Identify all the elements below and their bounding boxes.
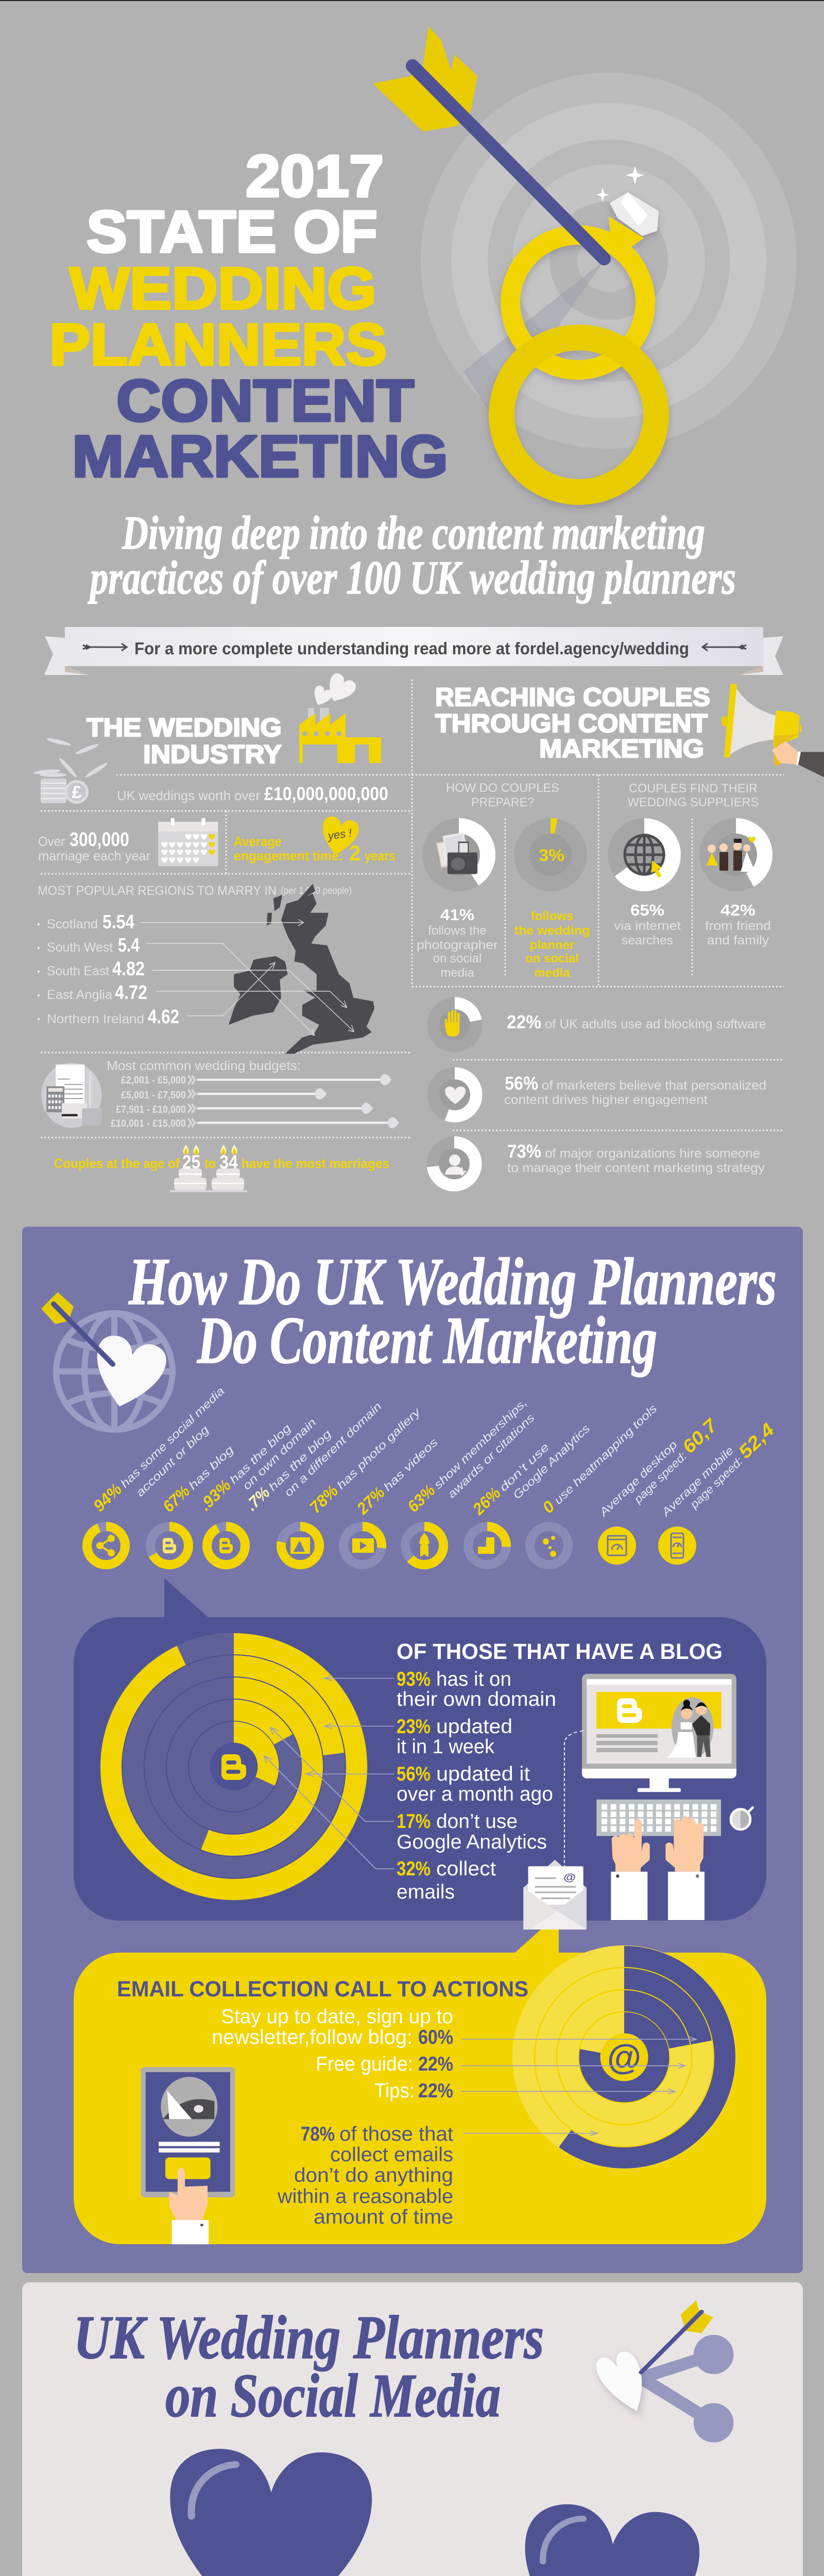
rotated stat labels: .93% <box>196 1476 234 1514</box>
donut: 3% wedding planner: on social <box>525 952 579 965</box>
stat: engagement: yes ! <box>326 826 353 842</box>
heading: INDUSTRY <box>143 740 282 769</box>
rotated stat labels: has photo gallery <box>334 1404 424 1492</box>
panel: UK wedding planners on social media <box>11 2282 803 2576</box>
title: WEDDING <box>70 256 376 321</box>
sub-heading: how do couples prepare: HOW DO COUPLES <box>446 781 559 795</box>
region list: Scotland <box>47 917 98 931</box>
region list <box>38 911 179 1028</box>
donut: 41% photographer <box>417 818 498 980</box>
email stats: collect emails <box>330 2144 453 2166</box>
donut: 42% friends and family: from friend <box>705 919 771 933</box>
rotated stat labels: account or blog <box>133 1423 212 1499</box>
arrows: regions to map <box>141 919 354 1036</box>
stat: 73% hire someone: of major organizations hire someone <box>545 1146 760 1161</box>
donut: 41% photographer: follows the <box>428 924 487 938</box>
email stats: 78% <box>301 2123 335 2145</box>
title: STATE OF <box>87 199 377 265</box>
email stats: newsletter,follow blog: <box>212 2026 413 2048</box>
rotated stat labels: Average desktop <box>596 1438 680 1519</box>
stat: worth: UK weddings worth over <box>117 788 260 803</box>
region list: 4.62 <box>148 1006 179 1028</box>
stat: 56% personalized: of marketers believe that personalized <box>542 1078 766 1093</box>
rotated stat labels: 78% <box>306 1481 341 1517</box>
banner: read more ribbon: For a more complete understanding read more at fordel.agency/wedding <box>134 639 689 658</box>
heading: UK Wedding Planners <box>74 2303 544 2371</box>
region list: 5.54 <box>102 911 134 933</box>
rotated stat labels <box>90 1381 778 1519</box>
icons: page speed <box>608 1533 683 1558</box>
heading: EMAIL COLLECTION CALL TO ACTIONS <box>117 1977 528 2002</box>
region list: South East <box>47 964 109 978</box>
icon: computer with hands <box>582 1674 753 1920</box>
chart: wedding budgets: Most common wedding budgets: <box>107 1059 301 1073</box>
speech tail <box>164 1578 209 1618</box>
blog stats: 93% <box>397 1668 431 1690</box>
heading: MARKETING <box>539 734 704 763</box>
stat: engagement: years <box>365 848 396 863</box>
sub-heading: how do couples prepare <box>446 781 559 809</box>
regions heading: (per 1,000 people) <box>281 886 352 896</box>
email stats: don’t do anything <box>294 2164 453 2187</box>
email stats <box>212 2006 453 2228</box>
rotated stat labels: 26% <box>469 1483 504 1519</box>
stat: engagement: engagement time: <box>234 848 343 863</box>
stat: marriages: marriage each year <box>38 848 150 863</box>
email stats: 60% <box>418 2026 453 2048</box>
blog stats <box>397 1668 556 1903</box>
blog stats: 17% <box>397 1810 431 1833</box>
balloons: blue hearts (followers) <box>50 2447 747 2576</box>
icon: wedding rings <box>502 192 659 492</box>
donut: 3% wedding planner: media <box>534 966 570 980</box>
stat: 56% personalized: 56% <box>505 1073 538 1094</box>
title: MARKETING <box>72 424 448 489</box>
stat: worth <box>117 783 388 804</box>
sub-heading: how do couples prepare: PREPARE? <box>471 795 534 809</box>
stat: couples age <box>54 1151 389 1173</box>
icon: cakes <box>170 1145 247 1192</box>
donut: 41% photographer: photographer <box>417 938 498 952</box>
region list: South West <box>47 940 113 955</box>
panel: of those that have a blog <box>74 1617 766 1921</box>
icon: calendar <box>158 818 218 866</box>
rotated stat labels: 60,7 <box>678 1414 722 1458</box>
blog stats: 23% <box>397 1716 431 1738</box>
icon row: stat donuts <box>87 1527 568 1565</box>
regions heading: MOST POPULAR REGIONS TO MARRY IN <box>38 884 277 898</box>
stat: 73% hire someone <box>426 1137 765 1191</box>
blog stats: updated <box>436 1716 512 1738</box>
donut: 42% friends and family <box>699 818 772 947</box>
stat: engagement: Average <box>234 834 282 849</box>
heading: on Social Media <box>165 2361 501 2430</box>
chart: wedding budgets: £2,001 - £5,000 <box>121 1075 186 1086</box>
email stats: 22% <box>418 2080 453 2102</box>
donut: 41% photographer: 41% <box>440 906 474 924</box>
panel: reaching couples <box>417 683 824 1191</box>
rotated stat labels: has the blog <box>227 1421 294 1486</box>
stat: 22% ad blocking <box>427 997 766 1052</box>
rotated stat labels: awards or citations <box>445 1411 537 1501</box>
donut: 65% internet searches: 65% <box>630 901 664 919</box>
chart: wedding budgets: £5,001 - £7,500 <box>121 1090 186 1101</box>
rotated stat labels: has the blog <box>266 1427 334 1494</box>
donut: 3% wedding planner: follows <box>531 909 573 923</box>
stat: 73% hire someone: 73% <box>507 1141 541 1162</box>
rotated stat labels: don’t use <box>497 1440 552 1494</box>
title: CONTENT <box>116 368 414 434</box>
email stats: Stay up to date, sign up to <box>221 2006 453 2028</box>
icons inside donuts <box>96 1527 696 1565</box>
icon: factory <box>299 671 381 763</box>
stat: 22% ad blocking: 22% <box>507 1011 541 1032</box>
rotated stat labels: use heatmapping tools <box>552 1402 659 1507</box>
blog stats: has it on <box>436 1668 511 1690</box>
rotated stat labels: page speed: <box>631 1449 689 1506</box>
blog stats: 56% <box>397 1763 431 1785</box>
donut: 41% photographer: media <box>440 966 474 980</box>
email stats: within a reasonable <box>277 2185 453 2208</box>
heading <box>74 2303 544 2430</box>
icon: arrow <box>373 26 604 259</box>
stat: worth: £10,000,000,000 <box>264 783 388 804</box>
blog stats: 32% <box>397 1858 431 1880</box>
target rings illustration <box>421 73 797 449</box>
heading: OF THOSE THAT HAVE A BLOG <box>397 1639 723 1664</box>
donut: 3% wedding planner: planner <box>530 938 574 952</box>
panel: email collection <box>74 1913 766 2244</box>
stat: couples age: have the most marriages <box>242 1156 389 1171</box>
region list: 4.82 <box>112 958 145 980</box>
icon: coins <box>33 737 108 804</box>
dotted dividers: top section <box>41 680 784 1138</box>
region list: East Anglia <box>47 988 112 1002</box>
stat: 73% hire someone: to manage their content marketing strategy <box>507 1161 765 1175</box>
donut: 41% photographer: on social <box>433 952 482 965</box>
donut: 65% internet searches: via internet <box>614 919 681 933</box>
sub-heading: couples find suppliers: WEDDING SUPPLIERS <box>627 795 759 809</box>
blog stats: emails <box>397 1881 455 1903</box>
rotated stat labels: 94% <box>90 1480 125 1515</box>
blog stats: Google Analytics <box>397 1831 547 1853</box>
title: 2017 <box>246 144 384 209</box>
blog stats: don’t use <box>436 1810 518 1833</box>
icon: sparkles <box>596 166 644 202</box>
donut: 42% friends and family: and family <box>707 934 769 947</box>
icon: budget paperwork <box>41 1063 101 1128</box>
chart: wedding budgets: £10,001 - £15,000 <box>111 1118 186 1129</box>
email stats: amount of time <box>314 2206 453 2228</box>
blog stats: updated it <box>436 1763 530 1785</box>
panel: the wedding industry <box>33 671 399 1192</box>
heading: Do Content Marketing <box>197 1303 657 1378</box>
chart: email radial: @ <box>607 2038 641 2077</box>
blog stats: over a month ago <box>397 1783 553 1805</box>
rotated stat labels: 63% <box>404 1481 439 1516</box>
email stats: 22% <box>418 2053 453 2075</box>
rotated stat labels: .7% <box>242 1483 273 1514</box>
stat: couples age: to <box>204 1156 216 1171</box>
rotated stat labels: 27% <box>353 1483 388 1518</box>
callout lines <box>461 2037 696 2136</box>
stat: couples age: Couples at the age of <box>54 1156 180 1171</box>
blog stats: collect <box>436 1858 496 1880</box>
callout lines <box>264 1676 394 1869</box>
sub-heading: couples find suppliers <box>627 782 759 809</box>
heading <box>435 683 710 763</box>
stat: marriages: 300,000 <box>70 829 129 851</box>
stat: engagement <box>234 815 396 865</box>
email stats: Free guide: <box>316 2053 413 2075</box>
dashed connector <box>564 1731 583 1866</box>
heading: REACHING COUPLES <box>435 683 710 711</box>
icon: globe with heart and arrow <box>41 1292 173 1430</box>
rotated stat labels: has videos <box>381 1435 440 1494</box>
icon: tablet with hand <box>141 2067 235 2244</box>
sub-heading: couples find suppliers: COUPLES FIND THEIR <box>629 782 758 795</box>
heading <box>128 1245 777 1378</box>
panel: how do UK wedding planners do content marketing <box>22 1227 803 2273</box>
stat: 22% ad blocking: of UK adults use ad blocking software <box>545 1017 766 1031</box>
icon: coins: £ <box>72 783 82 802</box>
rotated stat labels: 67% <box>159 1482 194 1516</box>
icon: share with heart and arrow <box>592 2300 733 2443</box>
donut: 3% wedding planner: the wedding <box>514 924 590 938</box>
heading: THROUGH CONTENT <box>435 709 708 738</box>
rotated stat labels: has some social media <box>118 1384 227 1490</box>
region list: Northern Ireland <box>47 1012 144 1026</box>
subtitle <box>88 506 736 604</box>
stat: couples age: 25 <box>182 1151 200 1173</box>
email stats: Tips: <box>374 2080 415 2102</box>
rotated stat labels: Average mobile <box>658 1444 736 1519</box>
rotated stat labels: on a different domain <box>282 1400 384 1499</box>
title: PLANNERS <box>49 312 387 378</box>
title <box>49 144 448 489</box>
email stats: of those that <box>339 2123 453 2145</box>
rotated stat labels: Google Analytics <box>510 1422 592 1502</box>
rotated stat labels: show memberships, <box>432 1396 529 1492</box>
stat: couples age: 34 <box>219 1151 238 1173</box>
rotated stat labels: page speed: <box>687 1454 745 1511</box>
icon: envelope <box>523 1860 587 1929</box>
rotated stat labels: has blog <box>186 1443 236 1492</box>
chart: blog radial <box>100 1633 368 1901</box>
chart: email radial <box>512 1945 736 2169</box>
donut: 42% friends and family: 42% <box>720 901 756 919</box>
chart: wedding budgets <box>107 1059 399 1129</box>
stat: marriages <box>38 829 150 863</box>
map: UK and Ireland <box>229 884 374 1054</box>
stat: marriages: Over <box>38 834 65 849</box>
banner: read more ribbon <box>44 627 783 675</box>
icon: megaphone <box>722 684 824 777</box>
rotated stat labels: 52,4 <box>734 1419 778 1463</box>
stat: engagement: 2 <box>349 841 360 865</box>
rotated stat labels: 0 <box>539 1497 558 1517</box>
icon: envelope: @ <box>563 1872 576 1883</box>
donut: 65% internet searches: searches <box>622 934 673 947</box>
heading: THE WEDDING <box>87 713 282 742</box>
blog stats: their own domain <box>397 1688 556 1710</box>
rotated stat labels: on own domain <box>240 1416 319 1493</box>
stat: 56% personalized: content drives higher engagement <box>504 1093 708 1107</box>
region list: 4.72 <box>115 982 147 1004</box>
chart: wedding budgets: £7,501 - £10,000 <box>116 1104 186 1115</box>
heading <box>87 713 282 769</box>
region list: 5.4 <box>118 935 140 956</box>
donut: 65% internet searches <box>608 818 681 947</box>
stat: 56% personalized <box>427 1067 766 1122</box>
blog stats: it in 1 week <box>397 1736 494 1758</box>
donut: 3% wedding planner <box>514 818 590 980</box>
donut: 3% wedding planner: 3% <box>539 846 564 865</box>
